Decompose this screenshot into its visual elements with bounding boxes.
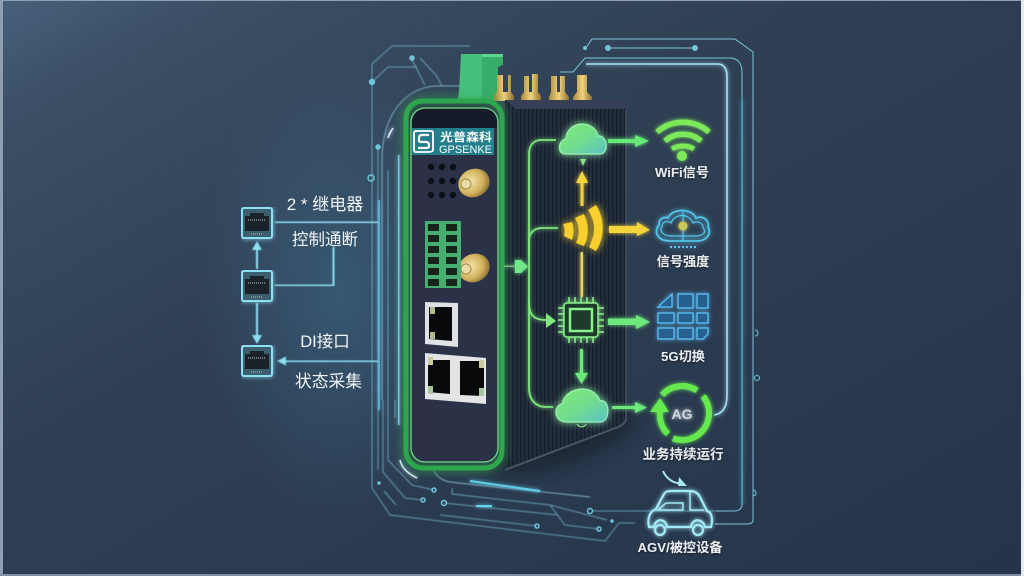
circuit traces: right and top (560, 39, 753, 524)
connector lines and arrows between left icons (252, 222, 378, 366)
icon: AG ring (650, 386, 709, 440)
icon: AG ring: AG (672, 406, 693, 422)
arrow: front to side (504, 260, 528, 273)
LED holes (428, 164, 456, 198)
arrow: signal up to cloud (576, 159, 588, 206)
device front panel (405, 99, 504, 470)
green top connector (457, 54, 503, 104)
gold antennas (494, 74, 592, 101)
label: WiFi signal: WiFi信号 (655, 164, 709, 180)
label: 5G switching: 5G切换 (661, 348, 705, 364)
circuit nodes (368, 56, 613, 531)
icon: WiFi (657, 122, 709, 161)
icon: AGV car (648, 491, 712, 535)
device side (476, 391, 644, 489)
arrow: top cloud to WiFi (608, 135, 649, 147)
RJ45 icon: relay 1 (242, 208, 272, 238)
label: signal strength: 信号强度 (657, 253, 709, 269)
green flow lines (529, 140, 558, 407)
cloud: top (559, 124, 606, 154)
trace highlights (378, 128, 540, 506)
arrow: chip to 5G (608, 315, 650, 329)
line: signal to chip (580, 252, 583, 297)
circuit traces: left and top (372, 46, 716, 541)
arrow: signal to strength (609, 222, 650, 236)
RJ45 icon: controller (242, 271, 272, 301)
icon: yellow signal (563, 205, 603, 251)
arrow: bottom cloud to ring (612, 402, 647, 413)
logo plate: 光普森科 (440, 130, 493, 144)
green terminal block (425, 221, 461, 288)
antenna connector 1 (454, 164, 494, 202)
icon: 5G grid (658, 294, 708, 339)
cloud: bottom (556, 389, 608, 422)
logo plate: GPSENKE (439, 144, 492, 156)
label: on-off control: 控制通断 (292, 230, 358, 249)
curved arrow (663, 471, 682, 483)
ethernet port (425, 302, 458, 347)
icon: signal-strength cloud (656, 210, 709, 247)
label: business continuity: 业务持续运行 (642, 446, 724, 462)
label: DI port: DI接口 (300, 332, 350, 351)
icon: chip (558, 297, 604, 343)
RJ45 icon: DI (242, 346, 272, 376)
label: AGV / controlled equipment: AGV/被控设备 (638, 539, 722, 555)
label: status collection: 状态采集 (295, 372, 362, 391)
dual ethernet port (425, 353, 486, 404)
antenna connector 2 (454, 249, 494, 287)
logo plate (412, 128, 494, 156)
label: relay: 2 * 继电器 (287, 195, 363, 214)
arrow: chip to bottom cloud (575, 349, 588, 384)
green arrow into chip (546, 313, 556, 328)
